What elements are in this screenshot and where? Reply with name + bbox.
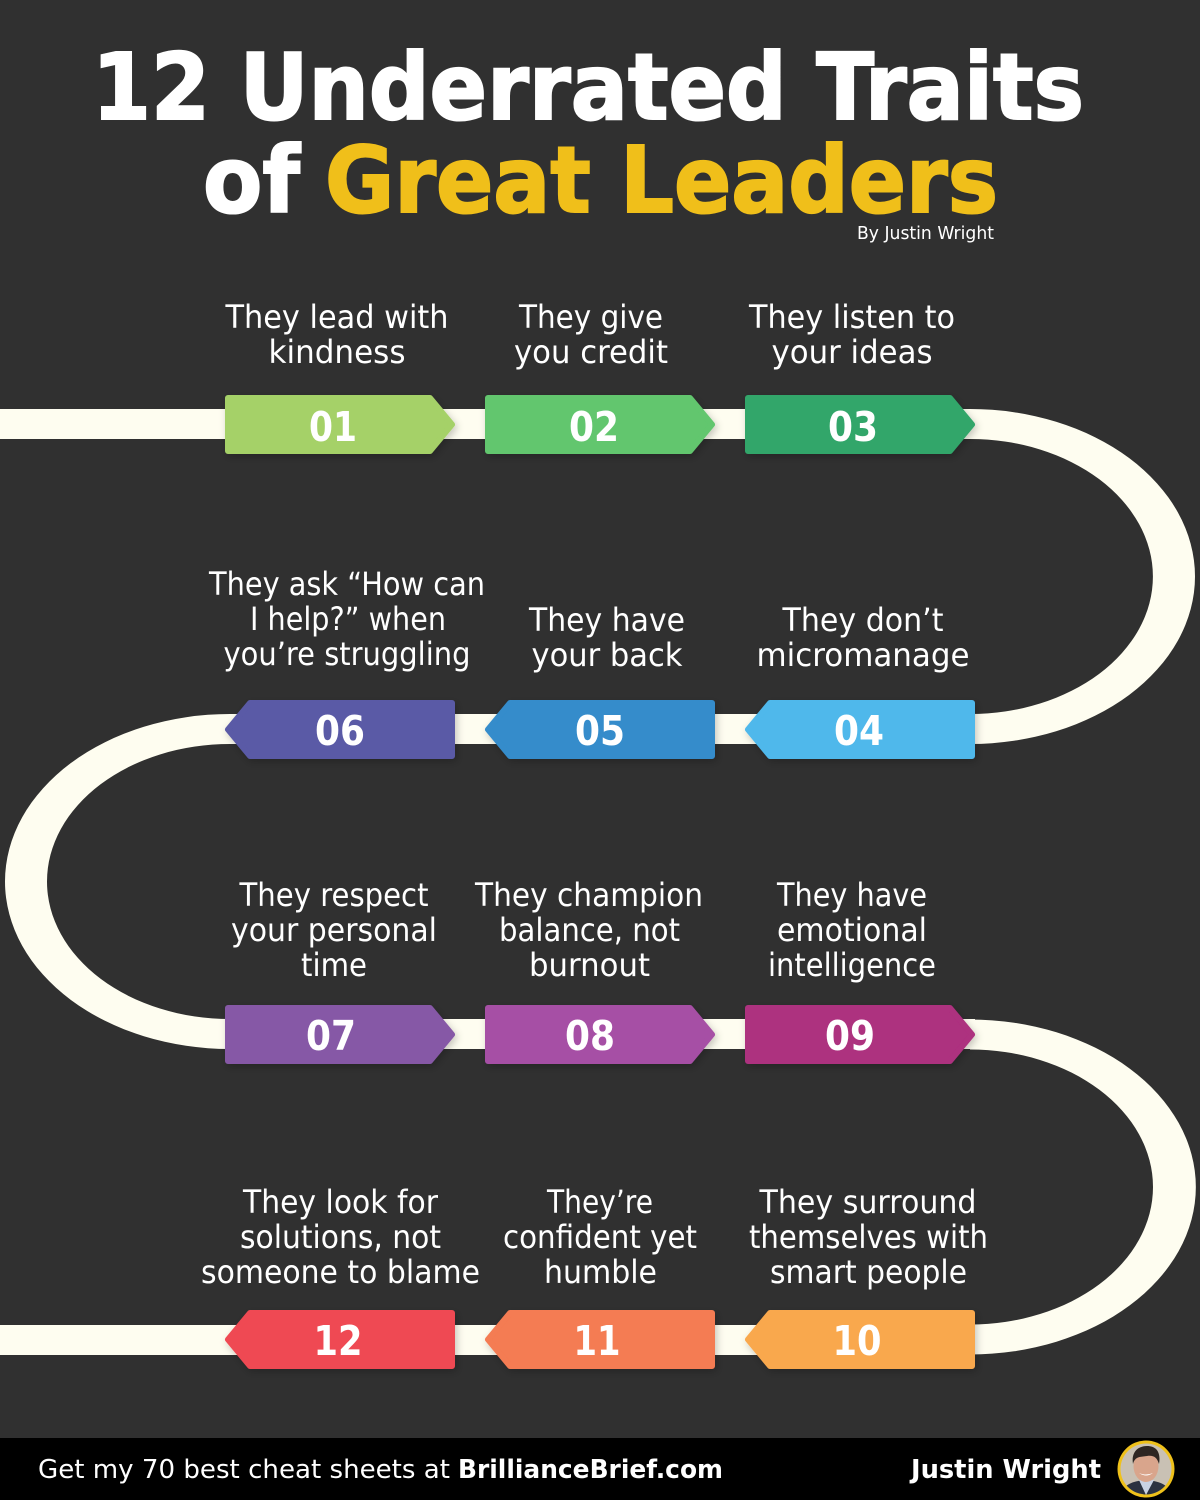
step 06: I help?” when [250,600,446,638]
step 12: They look for [242,1183,439,1221]
step 12: someone to blame [201,1253,480,1291]
step 08: burnout [529,946,650,984]
step 03: your ideas [772,333,932,371]
title: of [203,127,301,234]
step 01: 01 [309,403,357,451]
step 07: 07 [306,1012,356,1060]
byline: By Justin Wright [857,223,994,244]
step 06 [208,565,485,756]
step 02: you credit [514,333,668,371]
step 04 [748,601,972,756]
step 10: 10 [832,1317,882,1365]
step 07: your personal [231,911,437,949]
step 08: They champion [474,876,703,914]
step 09 [748,876,972,1061]
step 07: They respect [239,876,428,914]
step 02: 02 [569,403,619,451]
step 03 [748,298,972,451]
step 02: They give [518,298,663,336]
step 06: They ask “How can [208,565,485,603]
step 06: 06 [315,707,365,755]
step 08 [474,876,712,1061]
step 09: 09 [825,1012,875,1060]
step 10: themselves with [749,1218,988,1256]
step 01 [225,298,452,451]
step 11: humble [544,1253,657,1291]
step 10 [748,1183,988,1366]
step 01: They lead with [225,298,448,336]
step 05: your back [532,636,683,674]
footer bar [0,1438,1200,1500]
title: Great Leaders [325,127,998,234]
footer author name: Justin Wright [909,1455,1101,1485]
step 05: They have [528,601,685,639]
title [92,34,1084,234]
icon: author portrait [1118,1440,1174,1498]
step 09: They have [776,876,927,914]
title: 12 Underrated Traits [92,34,1084,141]
step 08: balance, not [499,911,680,949]
step 07 [228,876,452,1061]
step 11: They’re [546,1183,653,1221]
step 12: 12 [314,1317,362,1365]
step 01: kindness [268,333,406,371]
step 02 [488,298,712,451]
step 03: They listen to [748,298,955,336]
footer call to action: Get my 70 best cheat sheets at [38,1455,450,1485]
step 11: 11 [574,1317,620,1365]
step 04: 04 [834,707,884,755]
step 11 [488,1183,712,1366]
step 07: time [301,946,367,984]
step 06: you’re struggling [224,635,470,673]
step 10: They surround [759,1183,976,1221]
step 04: micromanage [756,636,970,674]
step 12 [201,1183,480,1366]
step 05: 05 [575,707,625,755]
winding road [0,409,1196,1355]
step 09: intelligence [768,946,936,984]
step 12: solutions, not [240,1218,441,1256]
step 11: confident yet [503,1218,697,1256]
step 05 [488,601,712,756]
step 09: emotional [777,911,927,949]
step 08: 08 [565,1012,615,1060]
step 10: smart people [770,1253,967,1291]
step 03: 03 [828,403,878,451]
footer website: BrillianceBrief.com [458,1455,723,1485]
step 04: They don’t [782,601,944,639]
